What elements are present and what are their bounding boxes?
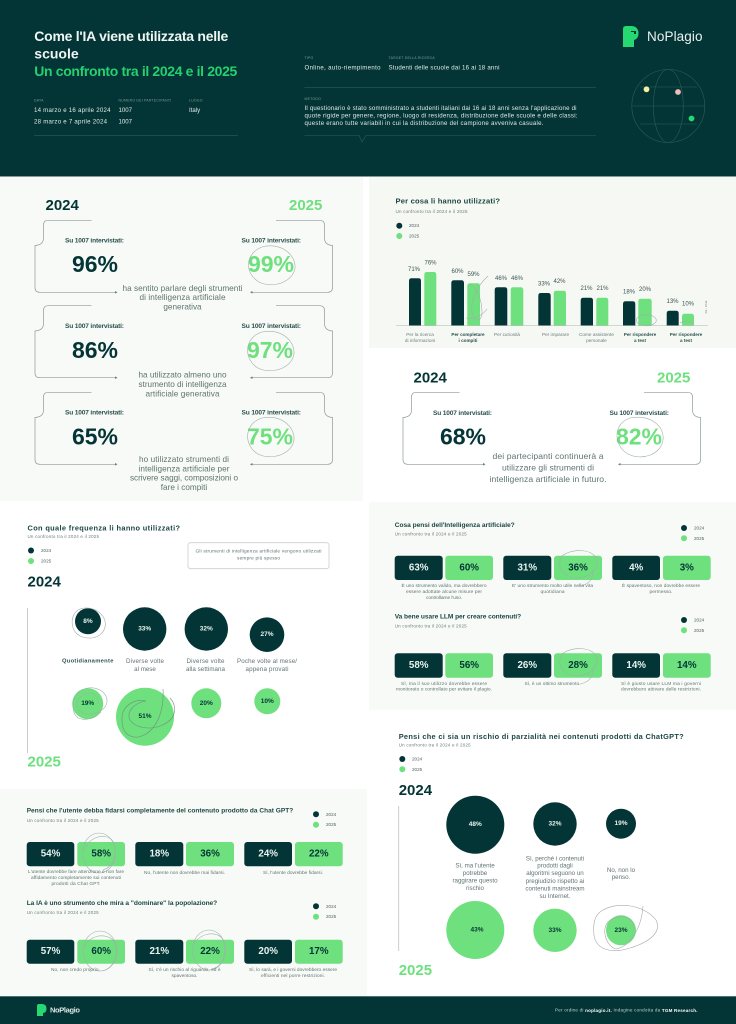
callout: note: Gli strumenti di intelligenza artificiale vengono utilizzati [196, 548, 322, 554]
section: trust in ChatGPT: Pensi che l'utente debba fidarsi completamente del contenuto prodotto da Chat GPT? [27, 808, 293, 814]
row: used tools for homework: 75% [247, 424, 293, 450]
survey details table: Italy [189, 107, 201, 114]
section: trust in ChatGPT: Un confronto tra il 2024 e il 2025 [27, 818, 99, 823]
panel: awareness comparison [0, 177, 363, 501]
section: using LLMs for content: dovrebbero attivare delle restrizioni. [621, 686, 701, 692]
bar chart: Per rispondere [670, 332, 703, 337]
bar chart: a test [634, 338, 646, 343]
row: heard of tools: generativa [163, 302, 202, 312]
section: what do you think of AI: 3% [680, 562, 694, 574]
survey type and target: Studenti delle scuole dai 16 ai 18 anni [388, 64, 500, 72]
section: domination question: efficienti nel porre restrizioni. [261, 973, 325, 979]
bubbles 2024: 8% [83, 618, 93, 625]
bubbles 2024: 32% [548, 820, 562, 828]
callout: future use: dei partecipanti continuerà a [492, 451, 604, 461]
row: used at least one tool: 86% [72, 337, 118, 363]
section: domination question: 20% [258, 946, 278, 957]
section: domination question: La IA è uno strumento che mira a "dominare" la popolazione? [27, 900, 217, 907]
bubble labels: rischio [466, 885, 484, 892]
survey type and target [304, 56, 596, 88]
survey details table [34, 98, 238, 136]
bar chart: 33% [538, 282, 551, 288]
bubbles 2025: 33% [548, 927, 562, 934]
section: what do you think of AI: E' uno strumento molto utile nella vita [512, 583, 593, 589]
section: trust in ChatGPT: affidamento completamente sui contenuti [31, 875, 121, 881]
year heading 2024: 2024 [414, 370, 448, 386]
section: domination question: Sì, lo sarà, e i governi dovrebbero essere [249, 967, 337, 973]
section: what do you think of AI: È spaventoso, non dovrebbe essere [622, 582, 700, 589]
bubble labels: raggirare questo [452, 878, 498, 884]
callout: future use [403, 392, 700, 484]
survey details table: 1007 [118, 118, 133, 126]
bubbles 2025: 23% [614, 927, 628, 934]
bar chart: a test [680, 338, 692, 343]
row: used at least one tool [35, 306, 332, 398]
frequency labels: Poche volte al mese/ [237, 658, 297, 665]
bubble labels: pregiudizio rispetto ai [526, 878, 584, 885]
year heading 2024: 2024 [399, 782, 433, 799]
method text: queste erano tutte variabili in cui la distribuzione del campione avveniva casuale. [304, 120, 544, 127]
section: using LLMs for content: 14% [677, 660, 697, 671]
bubbles 2025: 51% [138, 713, 152, 720]
legend: 2025 [409, 234, 420, 238]
subheading: Un confronto tra il 2024 e il 2025 [28, 534, 99, 539]
logo: NoPlagio [647, 29, 702, 44]
header panel [0, 0, 736, 176]
section: trust in ChatGPT: 22% [309, 848, 329, 860]
section: domination question: 60% [91, 946, 111, 957]
legend: 2025 [41, 558, 52, 564]
section: domination question: 2024 [326, 904, 337, 909]
logo [623, 26, 702, 47]
section: domination question: No, non credo proprio. [51, 967, 100, 973]
bar chart: 13% [666, 299, 679, 305]
bubble labels: Sì, ma l'utente [455, 862, 495, 870]
bubbles 2024: 33% [138, 626, 151, 632]
bubbles 2024: 48% [469, 821, 482, 828]
row: heard of tools: di intelligenza artificiale [140, 293, 226, 302]
bubble labels: contenuti mainstream [525, 886, 585, 892]
bar chart: 60% [451, 269, 464, 275]
section: what do you think of AI: 36% [568, 562, 588, 574]
row: heard of tools: 96% [72, 251, 118, 277]
section: domination question: 21% [149, 946, 169, 957]
section: using LLMs for content: 56% [459, 660, 479, 671]
section: trust in ChatGPT: L'utente dovrebbe fare attenzione e non fare [28, 869, 124, 875]
section: what do you think of AI: essere adottate alcune misure per [406, 589, 482, 595]
section: trust in ChatGPT: 2025 [326, 822, 337, 827]
frequency labels: Diverse volte [126, 658, 165, 665]
callout: future use: intelligenza artificiale in futuro. [490, 474, 606, 484]
heading: Per cosa li hanno utilizzati? [396, 196, 500, 206]
bar chart: 21% [580, 286, 593, 292]
row: heard of tools [35, 220, 332, 312]
panel: bias risk [369, 710, 736, 996]
section: domination question: 57% [41, 946, 61, 957]
bubbles 2024: 27% [260, 631, 274, 638]
heading: Con quale frequenza li hanno utilizzati? [28, 524, 180, 532]
bubbles 2025 [446, 901, 658, 959]
title: Un confronto tra il 2024 e il 2025 [34, 63, 238, 79]
year heading 2025: 2025 [289, 197, 322, 214]
bar chart: 46% [495, 276, 508, 282]
survey details table: NUMERO DEI PARTECIPANTI [118, 98, 171, 102]
frequency labels [62, 658, 297, 673]
panel: frequency of use [0, 502, 367, 789]
axis line [397, 806, 400, 951]
bar chart: personale [586, 338, 607, 343]
bubbles 2025 [72, 688, 280, 746]
section: domination question: Un confronto tra il 2024 e il 2025 [27, 910, 99, 915]
method text [304, 97, 596, 142]
row: used tools for homework [35, 392, 332, 492]
row: used tools for homework: fare i compiti [161, 483, 207, 492]
footer logo: NoPlagio [50, 1006, 80, 1014]
section: what do you think of AI: 63% [409, 562, 429, 574]
row: used at least one tool: strumento di intelligenza [138, 380, 227, 389]
panel: opinion questions [369, 502, 736, 710]
method text: quote rigide per genere, regione, luogo di residenza, distribuzione delle scuole e delle classi: [304, 112, 578, 120]
title [34, 28, 238, 79]
survey details table: 1007 [118, 107, 133, 114]
frequency labels: al mese [134, 666, 156, 673]
bubble labels: No, non lo [607, 867, 636, 874]
survey details table: 14 marzo e 16 aprile 2024 [34, 107, 111, 114]
section: what do you think of AI: 2025 [694, 536, 705, 541]
bar chart: Per rispondere [624, 332, 657, 337]
survey type and target: TIPO [304, 56, 314, 60]
bubbles 2024 [446, 796, 636, 854]
title: Come l'IA viene utilizzata nelle [34, 28, 229, 44]
survey details table: LUOGO [189, 98, 203, 102]
row: used at least one tool: ha utilizzato almeno uno [138, 370, 227, 380]
section: using LLMs for content: 28% [568, 660, 588, 671]
section: what do you think of AI: 31% [517, 562, 537, 574]
row: used tools for homework: Su 1007 intervistati: [65, 410, 124, 416]
method text: Il questionario è stato somministrato a studenti italiani dai 16 ai 18 anni senza l'applicazione di [304, 105, 576, 112]
section: what do you think of AI: permesso. [650, 589, 672, 595]
section: using LLMs for content: Sì, è un ottimo strumento. [524, 681, 580, 687]
callout: note [188, 543, 329, 569]
section: domination question: spaventoso. [172, 973, 198, 979]
legend [399, 756, 423, 772]
bar chart: 21% [596, 286, 609, 292]
bar chart: Per imparare [542, 332, 569, 337]
bubbles 2025: 10% [261, 698, 274, 705]
panel: future use comparison [403, 370, 700, 484]
section: domination question: Sì, c'è un rischio al riguardo, ed è [148, 967, 221, 973]
section: using LLMs for content: 58% [409, 660, 429, 671]
row: heard of tools: 99% [248, 251, 294, 277]
row: heard of tools: ha sentito parlare degli strumenti [122, 284, 243, 293]
bar chart: 18% [623, 290, 636, 296]
bubbles 2025: 43% [470, 926, 484, 934]
year heading 2025: 2025 [28, 754, 61, 770]
section: what do you think of AI: controllarne l'uso. [426, 595, 462, 601]
row: used tools for homework: intelligenza artificiale per [138, 464, 230, 473]
survey type and target: Online, auto-riempimento [304, 64, 381, 72]
bar chart: 20% [639, 287, 652, 293]
section: using LLMs for content: monitorato o controllato per evitare il plagio. [396, 686, 492, 692]
axis line [26, 608, 29, 753]
bar chart: 76% [424, 260, 437, 266]
section: domination question: 22% [200, 946, 220, 957]
section: using LLMs for content: Sì è giusto usare LLM ma i governi [621, 681, 701, 687]
bubbles 2025: 20% [200, 700, 213, 707]
frequency labels: Diverse volte [186, 658, 225, 665]
section: using LLMs for content: 2024 [694, 618, 705, 622]
callout: future use: utilizzare gli strumenti di [502, 462, 594, 472]
survey type and target: TARGET DELLA RICERCA [388, 56, 435, 60]
section: what do you think of AI: 60% [459, 562, 479, 574]
bubbles 2024: 19% [614, 820, 628, 827]
section: trust in ChatGPT: prodotti da Chat GPT. [52, 881, 100, 887]
section: using LLMs for content: Va bene usare LLM per creare contenuti? [395, 614, 521, 620]
legend: 2024 [41, 548, 52, 553]
section: using LLMs for content: 14% [626, 660, 646, 671]
row: used tools for homework: ho utilizzato strumenti di [139, 455, 229, 464]
bubble labels [452, 856, 636, 900]
bubble labels: su Internet. [540, 893, 571, 900]
bubble labels: algoritmi seguono un [526, 870, 584, 877]
section: trust in ChatGPT: 54% [41, 848, 61, 860]
frequency labels: appena provati [246, 666, 288, 673]
frequency labels: alla settimana [186, 666, 226, 673]
callout: note: sempre più spesso [237, 556, 280, 562]
survey details table: DATA [34, 98, 44, 102]
legend: 2024 [412, 756, 423, 762]
row: used at least one tool: Su 1007 intervistati: [65, 323, 124, 330]
bar chart: 42% [553, 279, 566, 285]
legend [396, 223, 420, 239]
panel: bar chart section [369, 177, 736, 348]
row: used tools for homework: 65% [72, 424, 118, 450]
bubble labels: penso. [612, 874, 631, 881]
section: using LLMs for content: Un confronto tra il 2024 e il 2025 [395, 624, 467, 628]
title: scuole [34, 46, 79, 62]
bar chart: Per curiosità [494, 332, 520, 337]
section: trust in ChatGPT: 36% [200, 848, 220, 860]
footer logo [37, 1004, 80, 1016]
year heading 2025: 2025 [657, 370, 690, 386]
section: what do you think of AI: 4% [629, 562, 644, 574]
section: what do you think of AI: 2024 [694, 526, 705, 530]
panel: trust and domination questions [0, 789, 367, 996]
section: what do you think of AI: Un confronto tra il 2024 e il 2025 [395, 532, 467, 536]
section: domination question: 2025 [326, 914, 337, 919]
icon: globe [632, 70, 705, 142]
section: what do you think of AI: quotidiana [540, 589, 565, 595]
row: heard of tools: Su 1007 intervistati: [242, 238, 301, 244]
section: trust in ChatGPT: 24% [258, 848, 278, 860]
section: what do you think of AI [395, 522, 711, 601]
bar chart: Come assistente [579, 332, 614, 337]
section: using LLMs for content: 26% [517, 660, 537, 671]
section: trust in ChatGPT: 58% [91, 848, 111, 860]
bar chart: 10% [682, 302, 695, 308]
method text: METODO [304, 97, 321, 101]
bar chart: Per completare [451, 332, 485, 337]
year heading 2024: 2024 [46, 197, 80, 214]
row: used at least one tool: artificiale generativa [146, 390, 220, 398]
row: used tools for homework: scrivere saggi, composizioni o [130, 474, 238, 482]
year heading 2025: 2025 [399, 962, 432, 979]
survey details table: 28 marzo e 7 aprile 2024 [34, 118, 108, 126]
row: heard of tools: Su 1007 intervistati: [65, 238, 124, 244]
section: trust in ChatGPT: 2024 [326, 812, 337, 817]
bar chart: Per la ricerca [406, 332, 434, 337]
section: what do you think of AI: È uno strumento valido, ma dovrebbero [402, 582, 487, 589]
section: trust in ChatGPT: Sì, l'utente dovrebbe fidarsi. [263, 870, 323, 876]
bubbles 2024 [72, 607, 284, 652]
frequency labels: Quotidianamente [62, 659, 114, 665]
row: used at least one tool: 97% [247, 337, 293, 363]
legend [28, 548, 52, 564]
bubble labels: potrebbe [463, 870, 488, 877]
bar chart: Dx - Chat [704, 300, 708, 313]
section: using LLMs for content [395, 614, 711, 692]
bar chart: di informazioni [405, 338, 435, 343]
bubbles 2025: 19% [81, 700, 94, 707]
section: trust in ChatGPT: 18% [149, 848, 169, 860]
bar chart: 59% [467, 272, 480, 278]
section: what do you think of AI: Cosa pensi dell'Intelligenza artificiale? [395, 522, 515, 529]
bubbles 2024: 32% [200, 626, 213, 632]
section: using LLMs for content: Sì, ma il suo utilizzo dovrebbe essere [401, 681, 487, 687]
bubble labels: prodotti dagli [537, 862, 573, 870]
bar chart [396, 260, 708, 343]
bubble labels: Sì, perché i contenuti [526, 856, 584, 862]
row: used at least one tool: Su 1007 intervistati: [242, 323, 301, 330]
subheading: Un confronto tra il 2024 e il 2025 [396, 209, 468, 214]
section: using LLMs for content: 2025 [694, 628, 705, 633]
bar chart: 46% [511, 276, 524, 282]
callout: future use: Su 1007 intervistati: [610, 410, 669, 417]
subheading: Un confronto tra il 2024 e il 2025 [399, 742, 471, 748]
row: used tools for homework: Su 1007 intervistati: [242, 410, 301, 416]
footer band [0, 996, 736, 1024]
callout: future use: Su 1007 intervistati: [433, 410, 492, 417]
section: trust in ChatGPT: No, l'utente non dovrebbe mai fidarsi. [144, 870, 225, 876]
section: domination question: 17% [309, 946, 329, 957]
section: trust in ChatGPT [27, 808, 343, 887]
bar chart: 71% [408, 267, 421, 273]
callout: future use: 82% [616, 424, 662, 450]
bar chart: i compiti [459, 338, 477, 343]
heading: Pensi che ci sia un rischio di parzialità nei contenuti prodotti da ChatGPT? [399, 732, 684, 741]
footer credit: Per ordine di noplagio.it. Indagine condotta da TGM Research. [555, 1008, 698, 1012]
legend: 2024 [409, 223, 420, 228]
section: domination question [27, 900, 343, 979]
callout: future use: 68% [440, 424, 486, 450]
year heading 2024: 2024 [28, 574, 62, 590]
legend: 2025 [412, 767, 423, 772]
